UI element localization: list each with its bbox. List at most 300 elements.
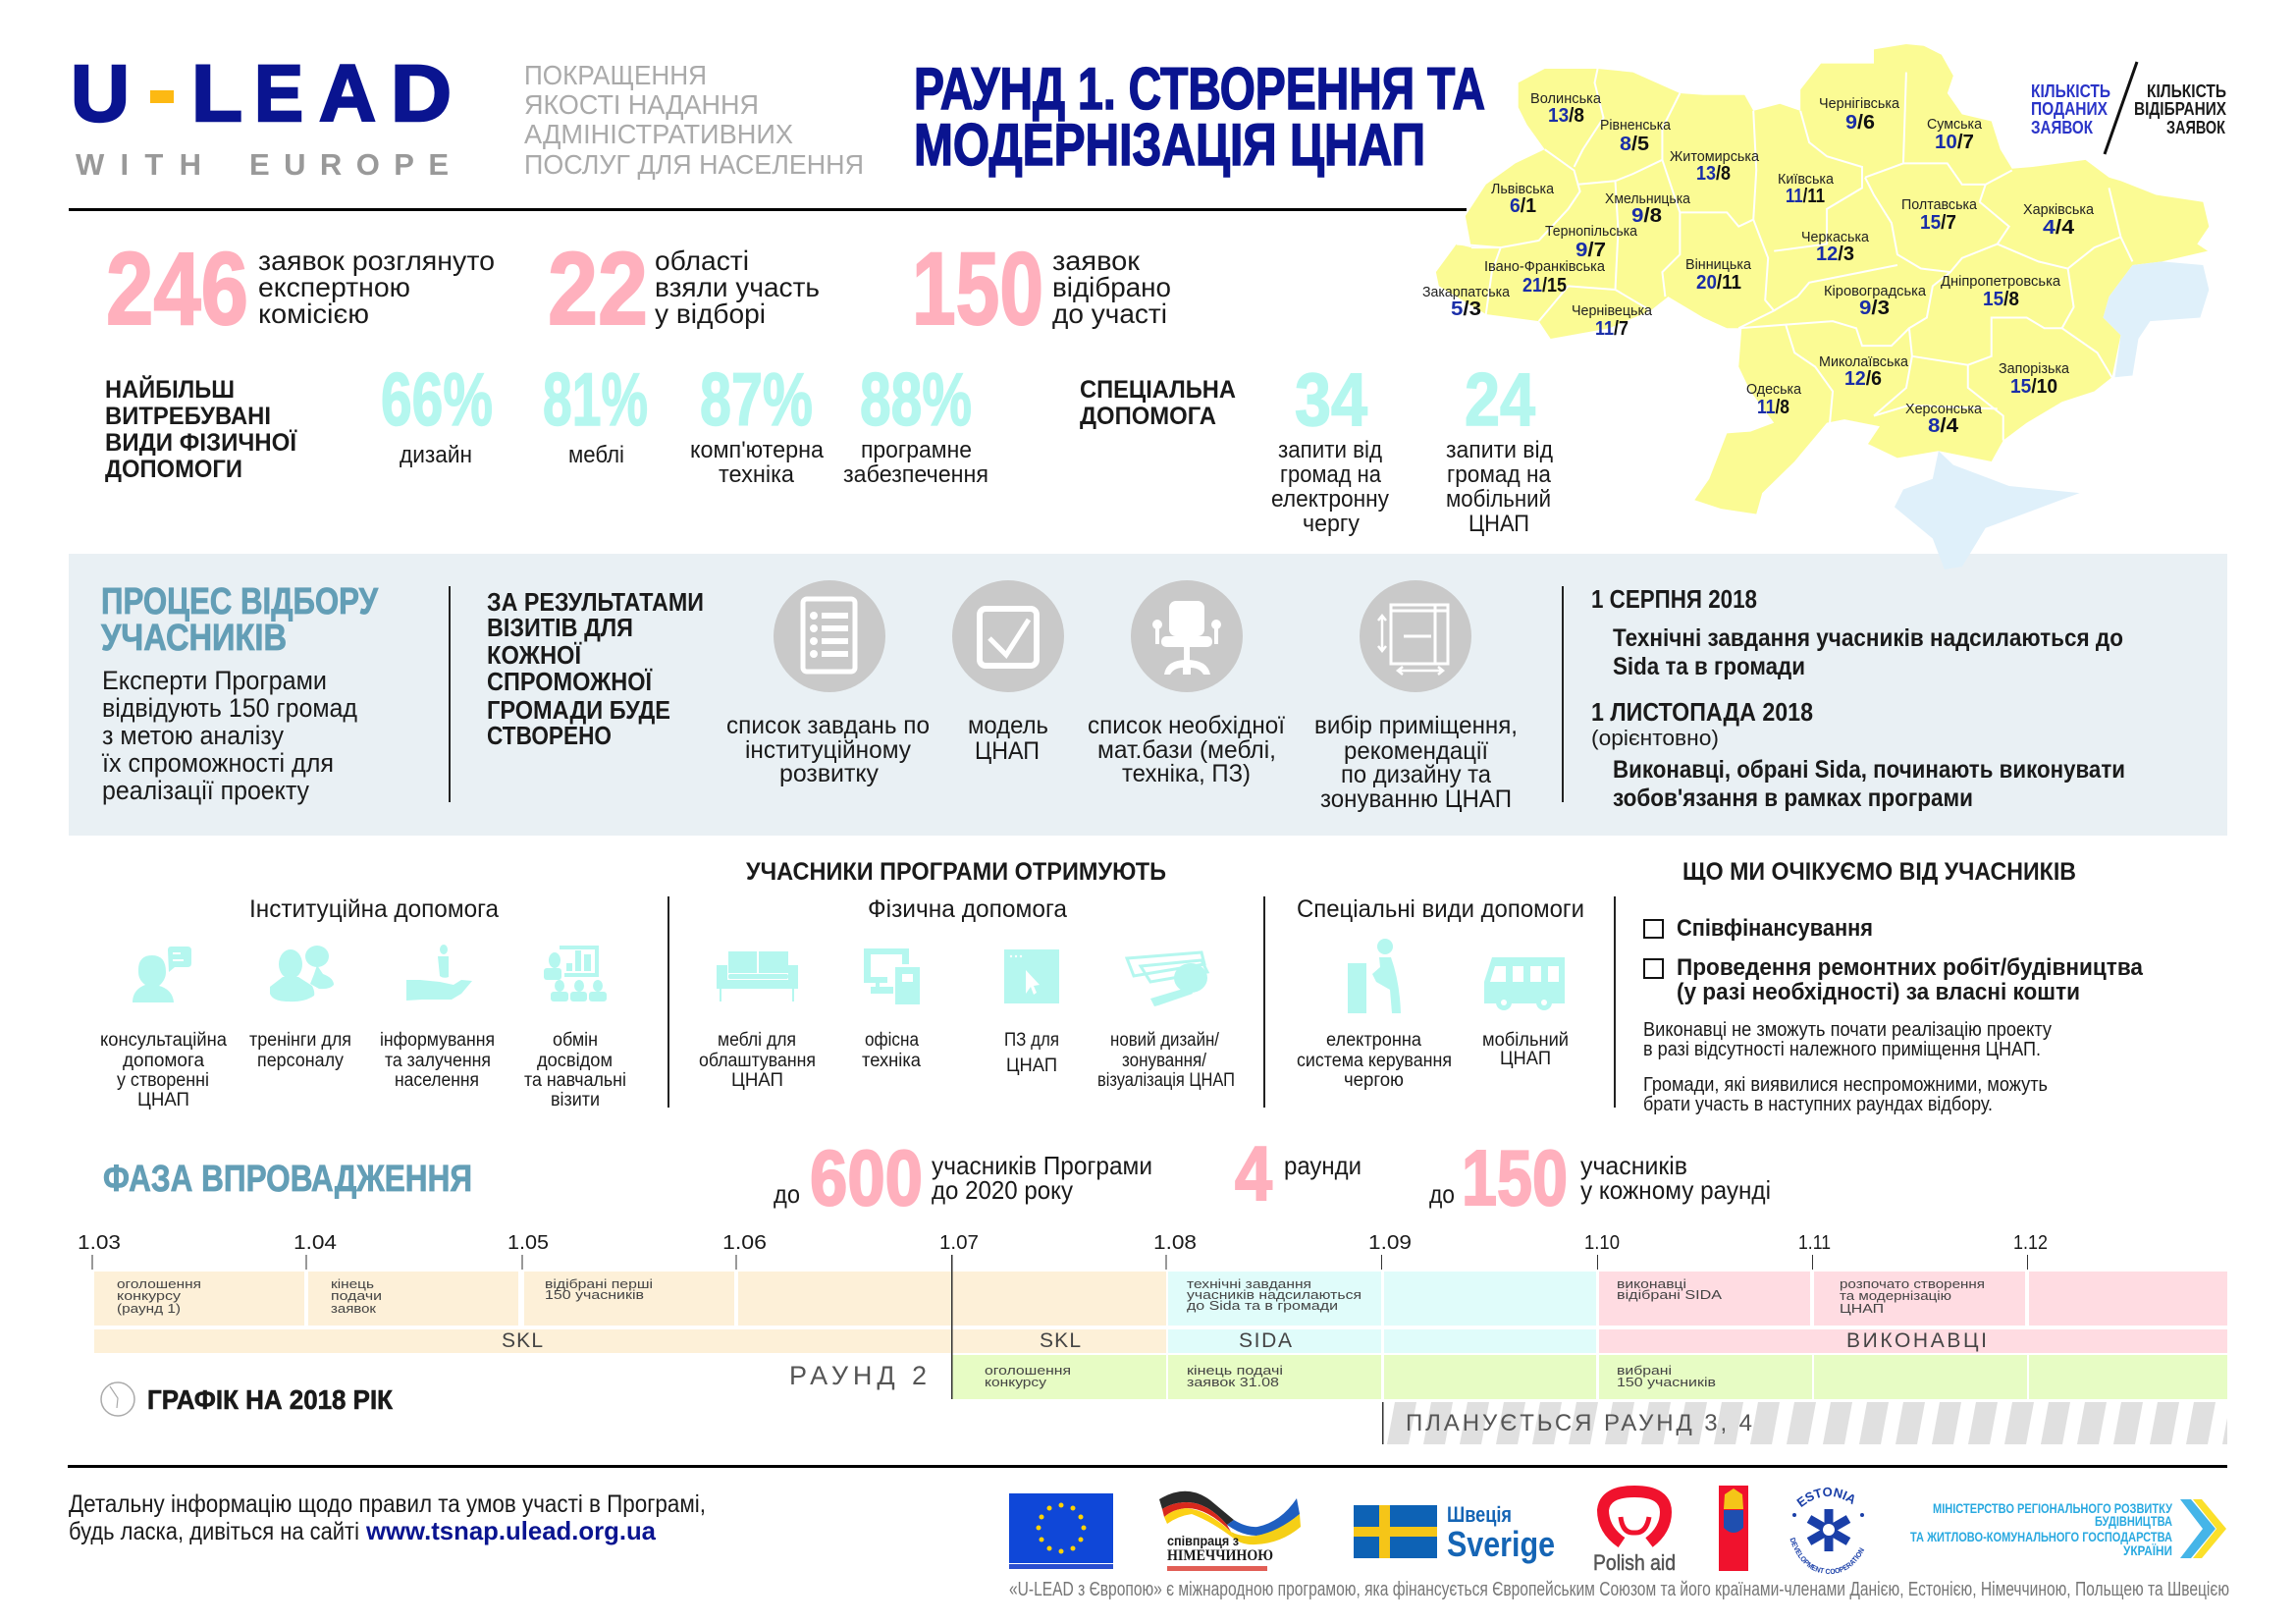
label: informing: та залучення bbox=[385, 1051, 491, 1071]
stat: 88 percent software bbox=[843, 358, 988, 488]
note: conditions: Громади, які виявилися неспроможними, можуть bbox=[1643, 1074, 2048, 1096]
timeline bar labels: SKL bbox=[1040, 1329, 1081, 1352]
text: experts visit communities: Експерти Програми bbox=[102, 666, 327, 695]
heading: special aid: ДОПОМОГА bbox=[1080, 403, 1216, 430]
logo: U-LEAD with Europe: E bbox=[254, 49, 303, 138]
label: mobile: мобільний bbox=[1482, 1030, 1569, 1051]
stat: up to 600 bbox=[774, 1134, 1152, 1221]
icon: exchange visits bbox=[544, 946, 607, 1001]
text: key dates: Виконавці, обрані Sida, починають виконувати bbox=[1613, 756, 2125, 784]
stat: up to 150: 150 bbox=[1462, 1134, 1568, 1221]
timeline bar labels: ВИКОНАВЦІ bbox=[1846, 1329, 1987, 1352]
label: exchange: візити bbox=[551, 1090, 600, 1110]
region labels: 9/8 bbox=[1631, 205, 1662, 227]
checkbox: renovation: (у разі необхідності) за власні кошти bbox=[1677, 979, 2080, 1005]
icon: floor plan bbox=[1360, 580, 1471, 692]
stat: 81 percent furniture: меблі bbox=[568, 442, 624, 468]
logo: cooperation with Germany bbox=[1159, 1491, 1301, 1571]
stat: 22 regions bbox=[548, 232, 820, 347]
region labels: 5/3 bbox=[1451, 298, 1481, 320]
stat: 150 selected bbox=[912, 232, 1171, 347]
timeline bottom row bbox=[952, 1355, 2227, 1399]
label: furniture: ЦНАП bbox=[731, 1070, 783, 1091]
note: conditions: Виконавці не зможуть почати реалізацію проекту bbox=[1643, 1019, 2052, 1041]
region labels: Харківська bbox=[2023, 201, 2095, 218]
logo: ministry of regional development: МІНІСТЕРСТВО РЕГІОНАЛЬНОГО РОЗВИТКУ bbox=[1933, 1500, 2172, 1516]
icon: office chair bbox=[1131, 580, 1243, 692]
logo: Polish aid bbox=[1593, 1491, 1676, 1575]
region labels: 11/7 bbox=[1595, 318, 1629, 340]
stat: 34 requests: запити від bbox=[1278, 437, 1382, 463]
icon: office equipment bbox=[864, 948, 920, 1004]
logo: U-LEAD with Europe: A bbox=[319, 49, 376, 138]
label: room selection: зонуванню ЦНАП bbox=[1320, 785, 1512, 813]
region labels: 8/5 bbox=[1620, 134, 1649, 155]
label: consulting: ЦНАП bbox=[137, 1090, 189, 1110]
heading: physical aid: Фізична допомога bbox=[868, 895, 1067, 923]
region labels: Одеська bbox=[1746, 381, 1802, 398]
tagline: ПОСЛУГ ДЛЯ НАСЕЛЕННЯ bbox=[524, 149, 864, 180]
timeline cell texts: розпочато створення bbox=[1840, 1276, 1985, 1291]
timeline middle row bbox=[94, 1329, 2227, 1353]
logo: ministry of regional development: БУДІВНИЦТВА bbox=[2095, 1513, 2172, 1529]
timeline cell texts: учасників надсилаються bbox=[1187, 1287, 1362, 1302]
region labels: Тернопільська bbox=[1545, 223, 1638, 240]
timeline cell texts: технічні завдання bbox=[1187, 1276, 1311, 1291]
footer: more info: www.tsnap.ulead.org.ua bbox=[365, 1516, 657, 1545]
map legend: КІЛЬКІСТЬ bbox=[2031, 81, 2110, 101]
timeline bar labels: SKL bbox=[502, 1329, 543, 1352]
timeline cell texts: (раунд 1) bbox=[117, 1301, 181, 1316]
note: conditions bbox=[1643, 1019, 2052, 1115]
region labels: 15/10 bbox=[2010, 376, 2057, 398]
stat: 87 percent computers: 87% bbox=[700, 358, 813, 442]
logo: Estonia development cooperation: DEVELOPMENT COOPERATION bbox=[1790, 1538, 1865, 1575]
label: software: ПЗ для bbox=[1004, 1030, 1059, 1051]
stat: 34 requests: чергу bbox=[1303, 511, 1360, 537]
text: experts visit communities bbox=[101, 666, 357, 805]
region labels: 12/3 bbox=[1816, 244, 1854, 265]
stat: 34 requests: електронну bbox=[1271, 486, 1389, 513]
icon: clock bbox=[101, 1382, 134, 1416]
stat: 4 rounds: 4 bbox=[1235, 1130, 1272, 1217]
region labels bbox=[1422, 90, 2095, 437]
icon: sofa bbox=[717, 951, 798, 1001]
label: new design: новий дизайн/ bbox=[1110, 1030, 1220, 1051]
stat: 24 requests bbox=[1446, 358, 1553, 537]
region labels: 13/8 bbox=[1548, 105, 1584, 127]
text: based on visits: ВІЗИТІВ ДЛЯ bbox=[487, 613, 633, 642]
stat: up to 150 bbox=[1429, 1134, 1771, 1221]
label: task list: інституційному bbox=[745, 736, 911, 764]
logo: Sweden bbox=[1354, 1502, 1555, 1564]
timeline cell texts: заявок bbox=[331, 1301, 376, 1316]
logo: Polish aid: Polish aid bbox=[1593, 1550, 1676, 1575]
timeline months: 1.05 bbox=[507, 1232, 549, 1254]
heading: most requested physical aid: ВИДИ ФІЗИЧНОЇ bbox=[105, 429, 297, 457]
text: key dates: зобов'язання в рамках програми bbox=[1613, 785, 1973, 812]
region labels: Херсонська bbox=[1905, 401, 1983, 417]
icon: info in hand bbox=[406, 945, 472, 1001]
region labels: 15/8 bbox=[1983, 289, 2019, 310]
region labels: 12/6 bbox=[1844, 368, 1882, 390]
stat: up to 150: до bbox=[1429, 1179, 1455, 1209]
text: key dates: (орієнтовно) bbox=[1591, 726, 1719, 750]
label: trainings: тренінги для bbox=[249, 1030, 351, 1051]
stat: 24 requests: громад на bbox=[1447, 461, 1552, 488]
label: informing: населення bbox=[395, 1070, 479, 1091]
stat: 24 requests: мобільний bbox=[1446, 486, 1551, 513]
text: key dates bbox=[1591, 584, 2125, 812]
stat: up to 600: 600 bbox=[810, 1134, 923, 1221]
label: new design bbox=[1097, 1030, 1235, 1091]
stat: 24 requests: 24 bbox=[1465, 358, 1535, 442]
label: queue system: система керування bbox=[1297, 1051, 1452, 1071]
title: РАУНД 1. СТВОРЕННЯ ТА bbox=[914, 56, 1485, 122]
region labels: Вінницька bbox=[1685, 256, 1752, 273]
heading: what we expect: ЩО МИ ОЧІКУЄМО ВІД УЧАСНИКІВ bbox=[1682, 858, 2076, 886]
icon: bus bbox=[1484, 957, 1565, 1010]
footer: more info bbox=[69, 1490, 706, 1545]
label: office equipment bbox=[862, 1030, 921, 1071]
label: exchange bbox=[524, 1030, 626, 1110]
timeline months: 1.12 bbox=[2013, 1232, 2048, 1254]
heading: most requested physical aid: ДОПОМОГИ bbox=[105, 456, 242, 483]
stat: up to 600: учасників Програми bbox=[932, 1151, 1152, 1180]
text: based on visits bbox=[487, 587, 704, 750]
region labels: Волинська bbox=[1530, 90, 1602, 107]
text: based on visits: СТВОРЕНО bbox=[487, 721, 612, 750]
stat: up to 600: до 2020 року bbox=[932, 1175, 1073, 1205]
stat: 88 percent software: 88% bbox=[860, 358, 972, 442]
region labels: 9/3 bbox=[1859, 298, 1890, 319]
timeline months: 1.10 bbox=[1584, 1232, 1620, 1254]
timeline months: 1.07 bbox=[939, 1232, 979, 1254]
planned rounds hatch: ПЛАНУЄТЬСЯ РАУНД 3, 4 bbox=[1406, 1410, 1752, 1436]
region labels: Сумська bbox=[1927, 116, 1983, 133]
icon: task list bbox=[774, 580, 885, 692]
region labels: Київська bbox=[1778, 171, 1835, 188]
icon: queue terminal bbox=[1348, 939, 1401, 1013]
stat: up to 150: учасників bbox=[1580, 1151, 1687, 1180]
region labels: Полтавська bbox=[1901, 196, 1978, 213]
logo: cooperation with Germany: співпраця з bbox=[1167, 1533, 1239, 1548]
label: queue system: чергою bbox=[1344, 1070, 1404, 1091]
label: round 2: РАУНД 2 bbox=[789, 1361, 927, 1390]
region labels: Кіровоградська bbox=[1824, 283, 1927, 299]
stat: 34 requests: громад на bbox=[1280, 461, 1382, 488]
label: exchange: обмін bbox=[553, 1030, 598, 1051]
text: key dates: Sida та в громади bbox=[1613, 653, 1805, 680]
stat: 22 regions: 22 bbox=[548, 232, 648, 347]
label: furniture list: мат.бази (меблі, bbox=[1097, 736, 1276, 764]
stat: 81 percent furniture bbox=[543, 358, 648, 468]
timeline months: 1.04 bbox=[294, 1232, 337, 1254]
tagline: АДМІНІСТРАТИВНИХ bbox=[524, 119, 793, 149]
stat: 4 rounds: раунди bbox=[1284, 1151, 1362, 1180]
region labels: 8/4 bbox=[1928, 415, 1959, 437]
timeline top row bbox=[94, 1272, 2227, 1326]
timeline cell texts: виконавці bbox=[1617, 1276, 1686, 1291]
stat: 22 regions: у відборі bbox=[655, 298, 766, 329]
label: queue system bbox=[1297, 1030, 1452, 1091]
stat: 150 selected: заявок bbox=[1052, 245, 1141, 276]
region labels: 6/1 bbox=[1510, 195, 1536, 217]
timeline months: 1.03 bbox=[78, 1232, 121, 1254]
region labels: Івано-Франківська bbox=[1484, 258, 1606, 275]
stat: 66 percent design bbox=[381, 358, 493, 468]
checkbox: renovation bbox=[1644, 954, 2144, 1005]
region labels: 15/7 bbox=[1920, 212, 1956, 234]
label: new design: зонування/ bbox=[1122, 1051, 1207, 1071]
region labels: Чернігівська bbox=[1819, 95, 1900, 112]
map legend: ЗАЯВОК bbox=[2031, 118, 2094, 137]
column: physical aid bbox=[699, 895, 1235, 1091]
footer: more info: Детальну інформацію щодо правил та умов участі в Програмі, bbox=[69, 1490, 706, 1518]
label: new design: візуалізація ЦНАП bbox=[1097, 1070, 1235, 1091]
logo: U-LEAD with Europe: WITH bbox=[76, 147, 201, 182]
logo: ministry of regional development: ТА ЖИТЛОВО-КОМУНАЛЬНОГО ГОСПОДАРСТВА bbox=[1910, 1529, 2172, 1544]
label: task list: розвитку bbox=[779, 760, 879, 787]
label: mobile bbox=[1482, 1030, 1569, 1069]
heading: selection process bbox=[101, 581, 378, 659]
label: task list: список завдань по bbox=[726, 712, 930, 739]
column: expectations bbox=[1643, 858, 2144, 1115]
stat: up to 150: у кожному раунді bbox=[1580, 1175, 1771, 1205]
label: room selection: вибір приміщення, bbox=[1314, 712, 1518, 739]
label: trainings: персоналу bbox=[257, 1051, 344, 1071]
label: office equipment: техніка bbox=[862, 1051, 921, 1071]
text: based on visits: КОЖНОЇ bbox=[487, 640, 582, 670]
label: informing bbox=[380, 1030, 495, 1091]
label: room selection: по дизайну та bbox=[1341, 761, 1491, 788]
timeline cell texts: та модернізацію bbox=[1840, 1288, 1951, 1303]
title: МОДЕРНІЗАЦІЯ ЦНАП bbox=[914, 112, 1425, 178]
stat: 150 selected: до участі bbox=[1052, 298, 1167, 329]
checkbox: co-financing: Співфінансування bbox=[1677, 915, 1873, 942]
timeline bar labels bbox=[502, 1329, 1987, 1352]
logo: ministry of regional development bbox=[1910, 1499, 2226, 1558]
label: task list bbox=[726, 712, 930, 787]
label: software bbox=[1004, 1030, 1059, 1076]
heading: institutional aid: Інституційна допомога bbox=[249, 895, 499, 923]
logo: Sweden: Sverige bbox=[1447, 1524, 1555, 1564]
logo: Sweden: Швеція bbox=[1447, 1502, 1512, 1527]
icon: design rolls and tape bbox=[1127, 952, 1207, 1006]
logo: U-LEAD with Europe: D bbox=[391, 49, 452, 138]
timeline cell texts: відібрані SIDA bbox=[1617, 1287, 1722, 1302]
label: queue system: електронна bbox=[1326, 1030, 1421, 1051]
region labels: 9/6 bbox=[1845, 112, 1875, 134]
label: exchange: та навчальні bbox=[524, 1070, 626, 1091]
stat: 22 regions: взяли участь bbox=[655, 272, 820, 302]
region labels: 21/15 bbox=[1522, 275, 1567, 297]
text: key dates: 1 СЕРПНЯ 2018 bbox=[1591, 584, 1757, 614]
map legend bbox=[2031, 62, 2226, 154]
timeline cell texts: 150 учасників bbox=[545, 1287, 644, 1302]
label: office equipment: офісна bbox=[865, 1030, 919, 1051]
timeline cell texts: кінець bbox=[331, 1276, 374, 1291]
label: furniture list: список необхідної bbox=[1088, 712, 1285, 739]
stat: 88 percent software: програмне bbox=[861, 437, 972, 463]
timeline cell texts: кінець подачі bbox=[1187, 1363, 1283, 1378]
logo: Denmark red banner bbox=[1719, 1486, 1748, 1571]
timeline chart 2018 bbox=[78, 1232, 2227, 1444]
logo: U-LEAD with Europe bbox=[71, 49, 452, 182]
timeline months: 1.06 bbox=[722, 1232, 767, 1254]
logo: U-LEAD with Europe: L bbox=[191, 49, 242, 138]
region labels: 4/4 bbox=[2043, 217, 2075, 239]
stat: 66 percent design: дизайн bbox=[400, 442, 472, 468]
label: consulting bbox=[100, 1030, 227, 1110]
map legend: ПОДАНИХ bbox=[2031, 99, 2108, 119]
label: trainings bbox=[249, 1030, 351, 1071]
label: model bbox=[968, 712, 1048, 765]
region labels: Львівська bbox=[1491, 181, 1555, 197]
stat: 34 requests bbox=[1271, 358, 1389, 537]
footer: more info: будь ласка, дивіться на сайті bbox=[69, 1518, 359, 1545]
heading: most requested physical aid: НАЙБІЛЬШ bbox=[105, 374, 235, 404]
stat: 246 applications: експертною bbox=[258, 272, 410, 302]
logo: EU flag bbox=[1009, 1493, 1113, 1569]
label: furniture: меблі для bbox=[718, 1030, 796, 1051]
heading: participants receive: УЧАСНИКИ ПРОГРАМИ ОТРИМУЮТЬ bbox=[746, 858, 1166, 886]
map legend: ЗАЯВОК bbox=[2166, 118, 2226, 137]
note: conditions: в разі відсутності належного приміщення ЦНАП. bbox=[1643, 1039, 2041, 1060]
tagline: ЯКОСТІ НАДАННЯ bbox=[524, 89, 759, 120]
stat: 66 percent design: 66% bbox=[381, 358, 493, 442]
region labels: 11/8 bbox=[1757, 397, 1789, 418]
logo: U-LEAD with Europe: U bbox=[71, 49, 130, 138]
heading: implementation phase: ФАЗА ВПРОВАДЖЕННЯ bbox=[103, 1159, 472, 1200]
stat: 87 percent computers bbox=[690, 358, 825, 488]
note: conditions: брати участь в наступних раундах відбору. bbox=[1643, 1094, 1993, 1115]
percentages of physical aid bbox=[381, 358, 988, 488]
region labels: 9/7 bbox=[1575, 240, 1606, 261]
stat: 88 percent software: забезпечення bbox=[843, 461, 988, 488]
heading: special aid types: Спеціальні види допомоги bbox=[1297, 895, 1584, 923]
text: key dates: 1 ЛИСТОПАДА 2018 bbox=[1591, 697, 1813, 727]
heading: most requested physical aid bbox=[105, 374, 297, 483]
label: furniture bbox=[699, 1030, 816, 1091]
text: experts visit communities: їх спроможності для bbox=[101, 748, 334, 778]
timeline months bbox=[78, 1232, 2048, 1254]
stat: 246 applications bbox=[106, 232, 495, 347]
title bbox=[914, 56, 1485, 178]
stat: 246 applications: комісією bbox=[258, 298, 369, 329]
label: consulting: у створенні bbox=[117, 1070, 209, 1091]
region labels: Житомирська bbox=[1670, 148, 1760, 165]
icon: trainers bbox=[270, 946, 334, 1001]
label: exchange: досвідом bbox=[537, 1051, 613, 1071]
label: furniture list bbox=[1088, 712, 1285, 787]
heading: special aid bbox=[1080, 376, 1236, 430]
map legend: КІЛЬКІСТЬ bbox=[2147, 81, 2226, 101]
stat: 22 regions: області bbox=[655, 245, 749, 276]
stat: 87 percent computers: техніка bbox=[719, 461, 795, 488]
stat: 24 requests: ЦНАП bbox=[1468, 511, 1529, 537]
heading: most requested physical aid: ВИТРЕБУВАНІ bbox=[105, 403, 271, 430]
stat: 24 requests: запити від bbox=[1446, 437, 1553, 463]
region labels: Рівненська bbox=[1600, 117, 1672, 134]
stat: 4 rounds bbox=[1235, 1130, 1362, 1217]
timeline cell texts bbox=[117, 1276, 1985, 1389]
text: experts visit communities: відвідують 150 громад bbox=[102, 693, 357, 723]
logo: ministry of regional development: УКРАЇНИ bbox=[2123, 1543, 2172, 1558]
region labels: 13/8 bbox=[1696, 163, 1731, 185]
logo: Estonia development cooperation bbox=[1790, 1487, 1865, 1575]
column: special aid bbox=[1297, 895, 1584, 1091]
timeline cell texts: 150 учасників bbox=[1617, 1375, 1716, 1389]
map shape bbox=[1436, 44, 2209, 569]
label: furniture list: техніка, ПЗ) bbox=[1122, 760, 1251, 787]
column: institutional aid bbox=[100, 895, 626, 1110]
stat: 87 percent computers: комп'ютерна bbox=[690, 437, 825, 463]
timeline cell texts: конкурсу bbox=[117, 1288, 182, 1303]
tagline: ПОКРАЩЕННЯ bbox=[524, 60, 707, 90]
stat: 246 applications: заявок розглянуто bbox=[258, 245, 495, 276]
label: room selection: рекомендації bbox=[1344, 737, 1488, 765]
timeline cell texts: оголошення bbox=[117, 1276, 201, 1291]
timeline cell texts: до Sida та в громади bbox=[1187, 1298, 1338, 1313]
checkbox: renovation: Проведення ремонтних робіт/будівництва bbox=[1677, 954, 2144, 981]
stat: 81 percent furniture: 81% bbox=[543, 358, 648, 442]
label: model: модель bbox=[968, 712, 1048, 739]
label: consulting: допомога bbox=[123, 1051, 204, 1071]
timeline months: 1.09 bbox=[1368, 1232, 1412, 1254]
stat: 150 selected: 150 bbox=[912, 232, 1043, 347]
region labels: 11/11 bbox=[1786, 186, 1825, 207]
heading: schedule 2018: ГРАФІК НА 2018 РІК bbox=[147, 1384, 394, 1415]
timeline cell texts: відібрані перші bbox=[545, 1276, 653, 1291]
timeline cell texts: ЦНАП bbox=[1840, 1301, 1884, 1316]
timeline cell texts: оголошення bbox=[985, 1363, 1071, 1378]
planned rounds hatch bbox=[1382, 1402, 2227, 1444]
timeline months: 1.08 bbox=[1153, 1232, 1197, 1254]
stat: 34 requests: 34 bbox=[1295, 358, 1367, 442]
stat: 246 applications: 246 bbox=[106, 232, 248, 347]
label: furniture: облаштування bbox=[699, 1051, 816, 1071]
text: based on visits: ГРОМАДИ БУДЕ bbox=[487, 695, 670, 725]
label: informing: інформування bbox=[380, 1030, 495, 1051]
timeline cell texts: заявок 31.08 bbox=[1187, 1375, 1279, 1389]
region labels: Чернівецька bbox=[1572, 302, 1653, 319]
region labels: Дніпропетровська bbox=[1941, 273, 2061, 290]
heading: special aid: СПЕЦІАЛЬНА bbox=[1080, 376, 1236, 404]
text: key dates: Технічні завдання учасників надсилаються до bbox=[1613, 624, 2123, 652]
label: consulting: консультаційна bbox=[100, 1030, 227, 1051]
region labels: Черкаська bbox=[1801, 229, 1870, 245]
panel: selection process bbox=[69, 554, 2227, 836]
timeline cell texts: конкурсу bbox=[985, 1375, 1047, 1389]
timeline months: 1.11 bbox=[1798, 1232, 1831, 1254]
region labels: Запорізька bbox=[1999, 360, 2070, 377]
region labels: Хмельницька bbox=[1605, 190, 1691, 207]
text: experts visit communities: реалізації проекту bbox=[102, 776, 309, 805]
label: room selection bbox=[1314, 712, 1518, 813]
region labels: 10/7 bbox=[1935, 132, 1974, 153]
logo: Estonia development cooperation: ESTONIA bbox=[1796, 1487, 1854, 1507]
region labels: 20/11 bbox=[1696, 272, 1741, 294]
heading: selection process: УЧАСНИКІВ bbox=[101, 618, 287, 659]
stat: up to 600: до bbox=[774, 1179, 800, 1209]
text: based on visits: СПРОМОЖНОЇ bbox=[487, 667, 653, 696]
label: mobile: ЦНАП bbox=[1500, 1049, 1551, 1069]
logo: U-LEAD with Europe: EUROPE bbox=[249, 147, 449, 182]
text: based on visits: ЗА РЕЗУЛЬТАТАМИ bbox=[487, 587, 704, 617]
logo: cooperation with Germany: НІМЕЧЧИНОЮ bbox=[1167, 1547, 1273, 1564]
heading: selection process: ПРОЦЕС ВІДБОРУ bbox=[101, 581, 378, 623]
